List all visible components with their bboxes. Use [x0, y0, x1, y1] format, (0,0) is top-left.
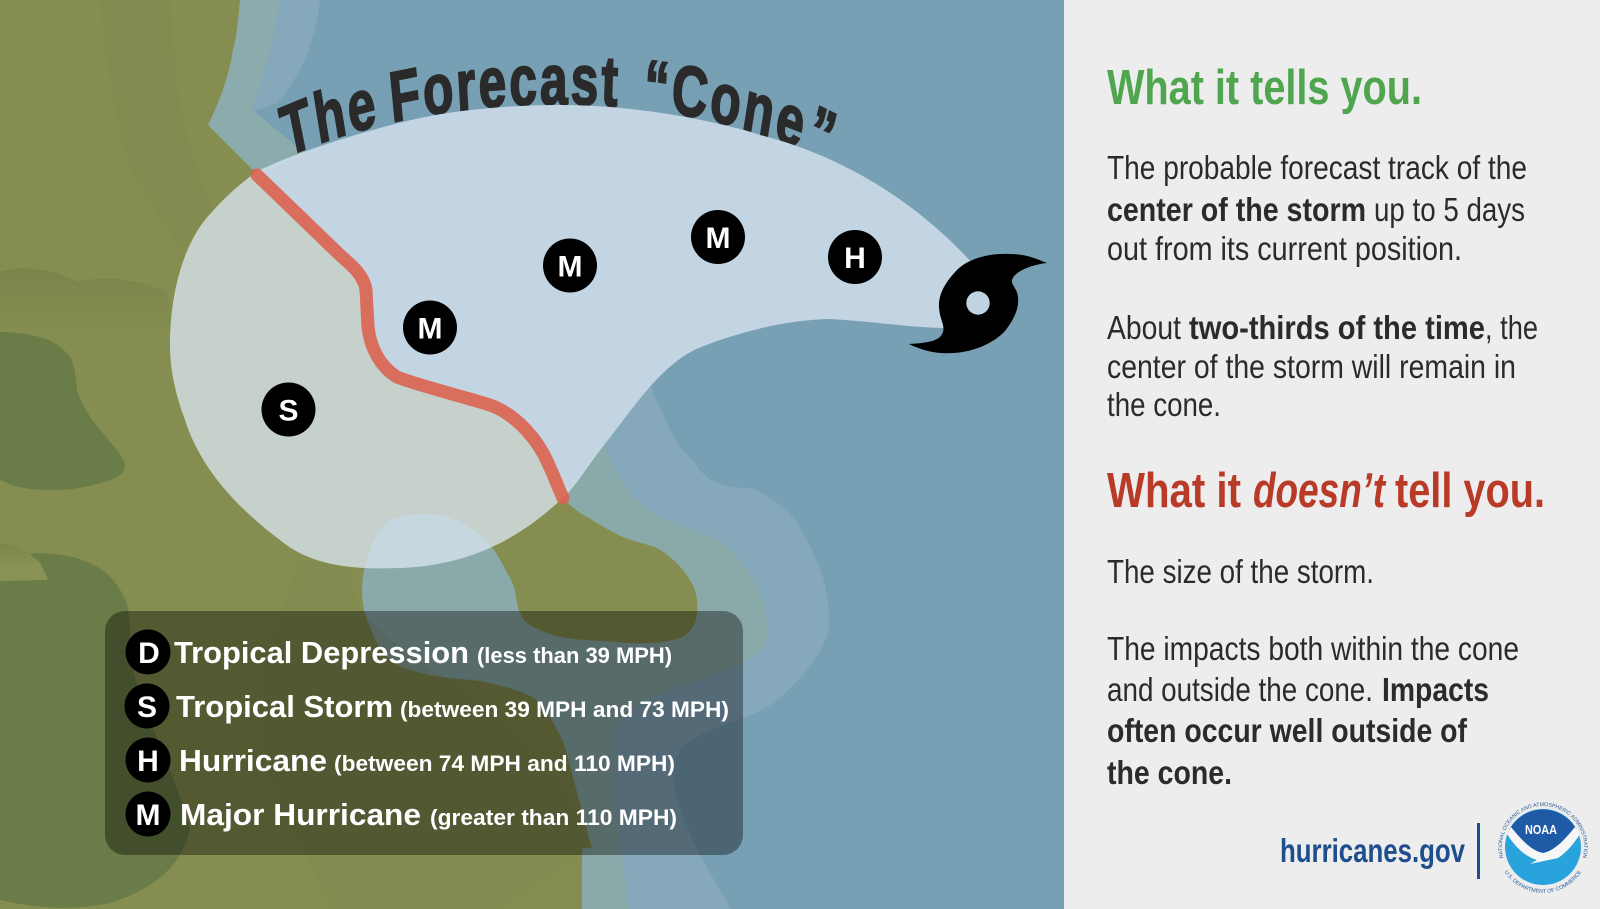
legend row: major hurricane: (greater than 110 MPH) — [430, 805, 677, 830]
shallow water outer band — [500, 385, 829, 909]
heading: what it tells you: What it tells you. — [1107, 61, 1422, 115]
icon: NOAA logo: NATIONAL OCEANIC AND ATMOSPHERIC ADMINISTRATION — [1498, 802, 1588, 858]
legend row: hurricane: (between 74 MPH and 110 MPH) — [334, 751, 675, 776]
text block: probable track: The probable forecast track of the — [1107, 149, 1527, 186]
forecast cone — [170, 105, 973, 568]
legend row: major hurricane — [126, 792, 677, 836]
text block: impacts: The impacts both within the cone — [1107, 630, 1519, 667]
legend row: hurricane: Hurricane — [179, 743, 327, 778]
shallow water inner band — [345, 445, 768, 909]
marker: M: M — [418, 312, 442, 346]
panel: explanation background — [1064, 0, 1600, 909]
text block: impacts: the cone. — [1107, 754, 1232, 791]
land mass — [0, 0, 697, 909]
legend row: major hurricane: M — [136, 799, 160, 832]
land shading: faint contour bumps — [0, 268, 172, 330]
title: The Forecast “Cone” — [277, 58, 837, 154]
text block: impacts: and outside the cone. — [1107, 671, 1373, 708]
text block: impacts: often occur well outside of — [1107, 712, 1468, 749]
legend row: tropical depression: (less than 39 MPH) — [477, 643, 672, 668]
heading: what it doesn't tell you: tell you. — [1395, 464, 1545, 518]
legend row: tropical depression: Tropical Depression — [174, 635, 469, 670]
marker: M — [691, 210, 745, 264]
marker: M: M — [558, 250, 582, 284]
divider — [1477, 823, 1480, 879]
land shading: large faint areas — [100, 0, 590, 909]
shallow water top outer band — [252, 0, 320, 112]
text block: impacts — [1107, 630, 1519, 791]
legend row: tropical storm — [124, 684, 729, 728]
panel: legend — [105, 611, 743, 855]
heading: what it doesn't tell you — [1107, 464, 1545, 518]
legend row: tropical storm: (between 39 MPH and 73 MPH) — [400, 697, 729, 722]
text block: probable track — [1107, 149, 1527, 267]
icon: hurricane symbol — [909, 254, 1047, 353]
legend row: major hurricane: Major Hurricane — [180, 797, 421, 832]
heading: what it doesn't tell you: What it — [1107, 464, 1241, 518]
legend row: tropical depression: D — [138, 637, 160, 670]
marker: M: M — [706, 222, 730, 255]
marker: S — [262, 382, 316, 436]
text block: two-thirds of the time — [1107, 309, 1538, 423]
land shading: dark green blob lower — [0, 553, 190, 908]
website link: hurricanes.gov — [1280, 832, 1466, 869]
forecast track line — [257, 175, 563, 498]
legend row: tropical storm: S — [137, 691, 157, 724]
text block: probable track: center of the storm — [1107, 191, 1366, 228]
icon: NOAA logo: U.S. DEPARTMENT OF COMMERCE — [1505, 870, 1582, 893]
legend row: hurricane — [126, 738, 675, 782]
legend row: hurricane: H — [137, 745, 159, 778]
land shading: dark green blob upper — [0, 332, 125, 490]
legend row: tropical depression — [126, 630, 672, 674]
marker: S: S — [278, 394, 299, 428]
text block: probable track: up to 5 days — [1374, 191, 1525, 228]
icon: NOAA logo: NOAA — [1525, 822, 1558, 837]
text block: two-thirds of the time: center of the storm will remain in — [1107, 348, 1516, 385]
marker: H: H — [844, 242, 866, 275]
text block: impacts: Impacts — [1382, 671, 1489, 708]
shallow water top inner band — [200, 0, 305, 175]
text block: two-thirds of the time: the cone. — [1107, 386, 1221, 423]
heading: what it doesn't tell you: doesn’t — [1253, 464, 1386, 518]
marker: M — [403, 300, 457, 354]
legend row: tropical storm: Tropical Storm — [176, 689, 393, 724]
marker: H — [828, 230, 882, 284]
text block: two-thirds of the time: About — [1107, 309, 1181, 346]
marker: M — [543, 238, 597, 292]
text block: size of the storm: The size of the storm. — [1107, 553, 1374, 590]
text block: probable track: out from its current position. — [1107, 230, 1462, 267]
text block: two-thirds of the time: , the — [1485, 309, 1538, 346]
land shading: small light patch — [0, 543, 48, 581]
text block: two-thirds of the time: two-thirds of the time — [1189, 309, 1485, 346]
map background: sea — [0, 0, 1064, 909]
icon: NOAA logo — [1498, 802, 1588, 893]
